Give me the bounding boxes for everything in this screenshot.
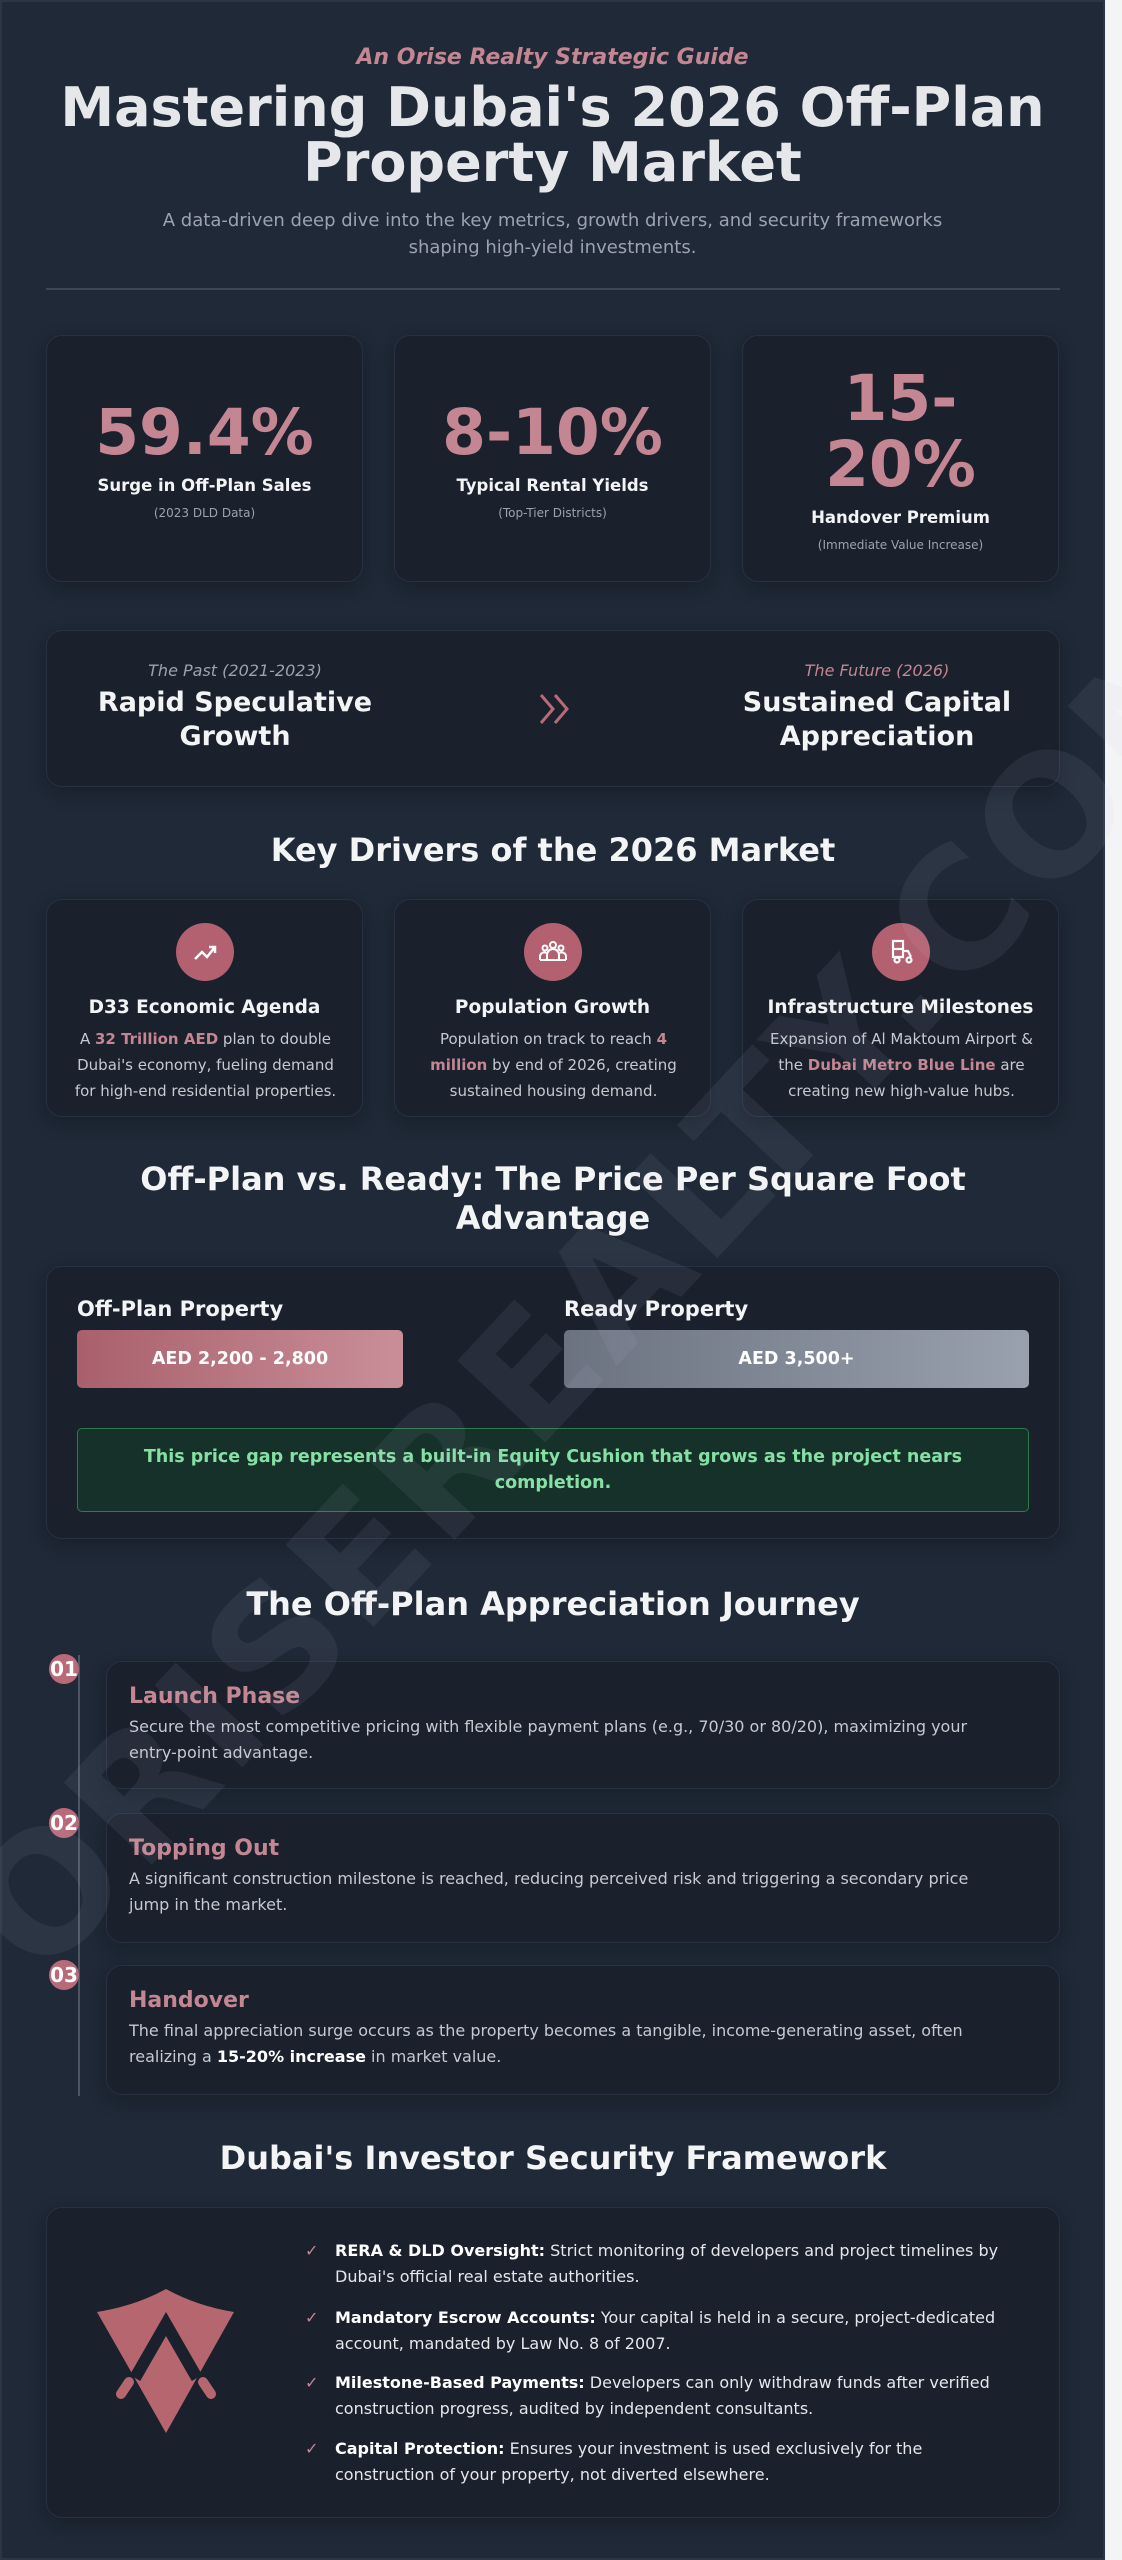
ready bar: AED 3,500+ [738,1349,855,1369]
heading: key drivers: Key Drivers of the 2026 Market [271,831,835,869]
driver: D33: D33 Economic Agenda [89,997,320,1018]
driver: D33 [46,899,363,1117]
timeline [49,1654,1060,2099]
stat card: 59.4%: Surge in Off-Plan Sales [98,476,311,495]
driver: infrastructure: Expansion of Al Maktoum Airport & the Dubai Metro Blue Line are creating new high-value hubs. [770,1030,1033,1100]
future [743,661,1011,752]
callout: equity cushion: This price gap represents a built-in Equity Cushion that grows as the project nears completion. [144,1447,962,1493]
off-plan bar: Off-Plan Property [77,1297,283,1321]
driver: population [394,899,711,1117]
step 1: Launch Phase [129,1684,300,1709]
past: Growth [179,721,291,752]
stat card: 59.4%: 59.4% [95,396,314,469]
heading: off-plan vs ready: Advantage [456,1199,650,1237]
heading: security: Dubai's Investor Security Framework [220,2139,886,2177]
heading: journey: The Off-Plan Appreciation Journey [246,1585,860,1623]
stat card: 8-10%: 8-10% [442,396,663,469]
description: A data-driven deep dive into the key metrics, growth drivers, and security frameworks shaping high-yield investments. [163,210,942,258]
callout: equity cushion [77,1428,1029,1512]
icon: vehicle [872,923,930,981]
driver: infrastructure [742,899,1059,1117]
ready bar [564,1297,1029,1388]
panel: security: Mandatory Escrow Accounts: Your capital is held in a secure, project-dedicated account, mandated by Law No. 8 of 2007. [335,2308,995,2353]
future: The Future (2026) [805,661,949,680]
stat card: 8-10%: Typical Rental Yields [456,476,648,495]
past [98,661,372,752]
title: Property Market [303,131,802,194]
driver: population: Population Growth [455,997,650,1018]
step 1: 01 [50,1657,78,1681]
future: Sustained Capital [743,687,1011,718]
panel: past vs future [46,630,1060,787]
driver: D33: A 32 Trillion AED plan to double Dubai's economy, fueling demand for high-end residential properties. [75,1030,336,1100]
step 3 [49,1960,1060,2099]
stat card: 15-20%: (Immediate Value Increase) [818,538,983,552]
step 3: The final appreciation surge occurs as the property becomes a tangible, income-generating asset, often realizing a 15-20% increase in market value. [129,2021,963,2066]
driver: infrastructure: Infrastructure Milestones [768,997,1033,1018]
ready bar: Ready Property [564,1297,748,1321]
stat card: 8-10% [394,335,711,582]
panel: security: ✓ [305,2308,318,2327]
icon: people [524,923,582,981]
stat card: 15-20%: Handover Premium [811,508,990,527]
title: Mastering Dubai's 2026 Off-Plan [60,76,1045,139]
icon: trend [176,923,234,981]
stat card: 59.4% [46,335,363,582]
icon: shield logo [97,2289,234,2433]
panel: security [46,2207,1060,2518]
panel: security: ✓ [305,2373,318,2392]
stat card: 59.4%: (2023 DLD Data) [154,506,255,520]
off-plan bar: AED 2,200 - 2,800 [152,1349,328,1369]
step 1 [49,1654,1060,1793]
driver: population: Population on track to reach 4 million by end of 2026, creating sustained housing demand. [430,1030,677,1100]
list: ✓ [305,2241,318,2260]
step 2 [49,1808,1060,1947]
panel: security: ✓ [305,2439,318,2458]
panel: security: Milestone-Based Payments: Developers can only withdraw funds after verified construction progress, audited by independent consultants. [335,2373,990,2418]
step 1: Secure the most competitive pricing with flexible payment plans (e.g., 70/30 or 80/20), maximizing your entry-point advantage. [129,1717,967,1762]
title [60,76,1045,194]
stat card: 15-20%: 20% [825,428,976,501]
past: The Past (2021-2023) [148,661,322,680]
step 3: Handover [129,1988,249,2013]
stat card: 8-10%: (Top-Tier Districts) [498,506,607,520]
step 2: Topping Out [129,1836,279,1861]
arrow [540,694,569,724]
off-plan bar [77,1297,403,1388]
step 3: 03 [50,1963,78,1987]
heading: off-plan vs ready: Off-Plan vs. Ready: The Price Per Square Foot [140,1160,966,1198]
stat card: 15-20% [742,335,1059,582]
future: Appreciation [780,721,974,752]
list: RERA & DLD Oversight: Strict monitoring of developers and project timelines by Dubai's official real estate authorities. [335,2241,998,2286]
step 2: 02 [50,1811,78,1835]
step 2: A significant construction milestone is reached, reducing perceived risk and triggering a secondary price jump in the market. [129,1869,968,1914]
past: Rapid Speculative [98,687,372,718]
subtitle: An Orise Realty Strategic Guide [356,45,749,70]
panel: security: Capital Protection: Ensures your investment is used exclusively for the construction of your property, not diverted elsewhere. [335,2439,922,2484]
panel: price comparison [46,1266,1060,1539]
heading: off-plan vs ready [140,1160,966,1237]
stat card: 15-20%: 15- [844,362,957,435]
